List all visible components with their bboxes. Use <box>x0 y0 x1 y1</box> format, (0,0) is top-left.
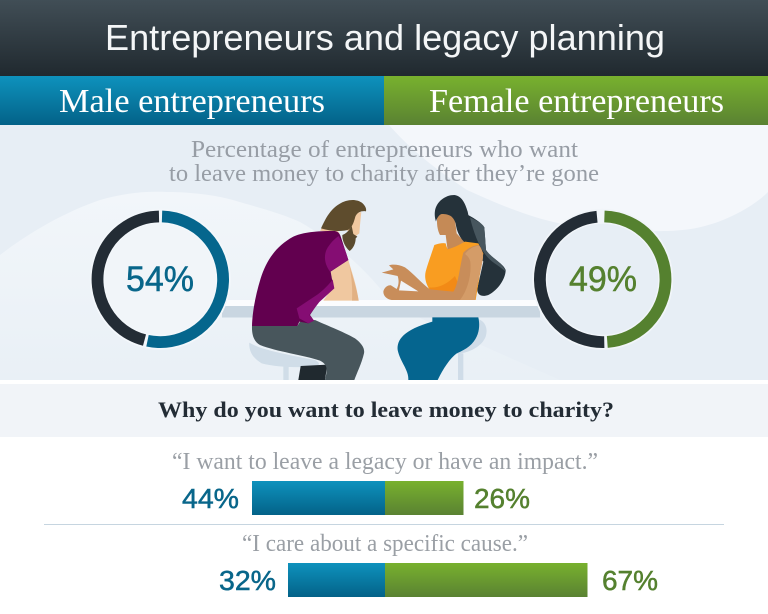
value: 54% <box>126 260 194 299</box>
skirt <box>398 317 479 380</box>
bar chart: legacy: 44% <box>182 483 239 514</box>
donut chart: male 54% <box>83 202 237 356</box>
top shade <box>429 276 465 300</box>
question band <box>0 384 768 437</box>
near arm <box>323 260 359 301</box>
subtitle: Percentage of entrepreneurs who want <box>191 136 578 163</box>
upper arm highlight <box>460 246 483 300</box>
hair back <box>460 210 506 296</box>
top <box>425 242 483 300</box>
hair highlight <box>470 217 506 272</box>
face <box>347 212 361 237</box>
far leg <box>298 365 327 380</box>
illustrated background panel <box>0 125 768 380</box>
bar chart: legacy: 26% <box>474 483 530 514</box>
face and neck <box>437 212 465 251</box>
quote: legacy: “I want to leave a legacy or have an impact.” <box>172 449 598 475</box>
bar chart: cause: 32% <box>219 565 276 596</box>
title: Entrepreneurs and legacy planning <box>105 17 665 58</box>
illustration: man <box>249 200 366 380</box>
bar chart: cause: 67% <box>602 565 658 596</box>
sleeve <box>325 236 348 272</box>
value: 49% <box>569 260 637 299</box>
neck <box>320 222 340 233</box>
bar chart: legacy <box>182 481 530 515</box>
table <box>222 300 540 318</box>
hair front <box>435 195 479 247</box>
gap between hands <box>399 281 418 291</box>
donut chart: female 49% <box>538 214 668 344</box>
question band: Why do you want to leave money to charity? <box>158 397 614 422</box>
hair <box>321 200 366 231</box>
illustration: woman <box>382 195 506 380</box>
header: female entrepreneurs: Female entrepreneurs <box>429 83 724 120</box>
header: male entrepreneurs <box>0 76 384 125</box>
lower arm sleeve <box>297 279 334 323</box>
arm <box>382 245 483 300</box>
bar chart: cause <box>219 563 658 597</box>
header: male entrepreneurs: Male entrepreneurs <box>59 83 325 120</box>
quote: cause: “I care about a specific cause.” <box>242 531 528 557</box>
title banner <box>0 0 768 76</box>
stool <box>453 319 487 354</box>
beard <box>342 226 357 251</box>
trousers <box>252 320 364 380</box>
subtitle: to leave money to charity after they’re gone <box>169 160 599 187</box>
shirt <box>252 231 348 326</box>
header: female entrepreneurs <box>384 76 768 125</box>
stool <box>249 343 319 367</box>
